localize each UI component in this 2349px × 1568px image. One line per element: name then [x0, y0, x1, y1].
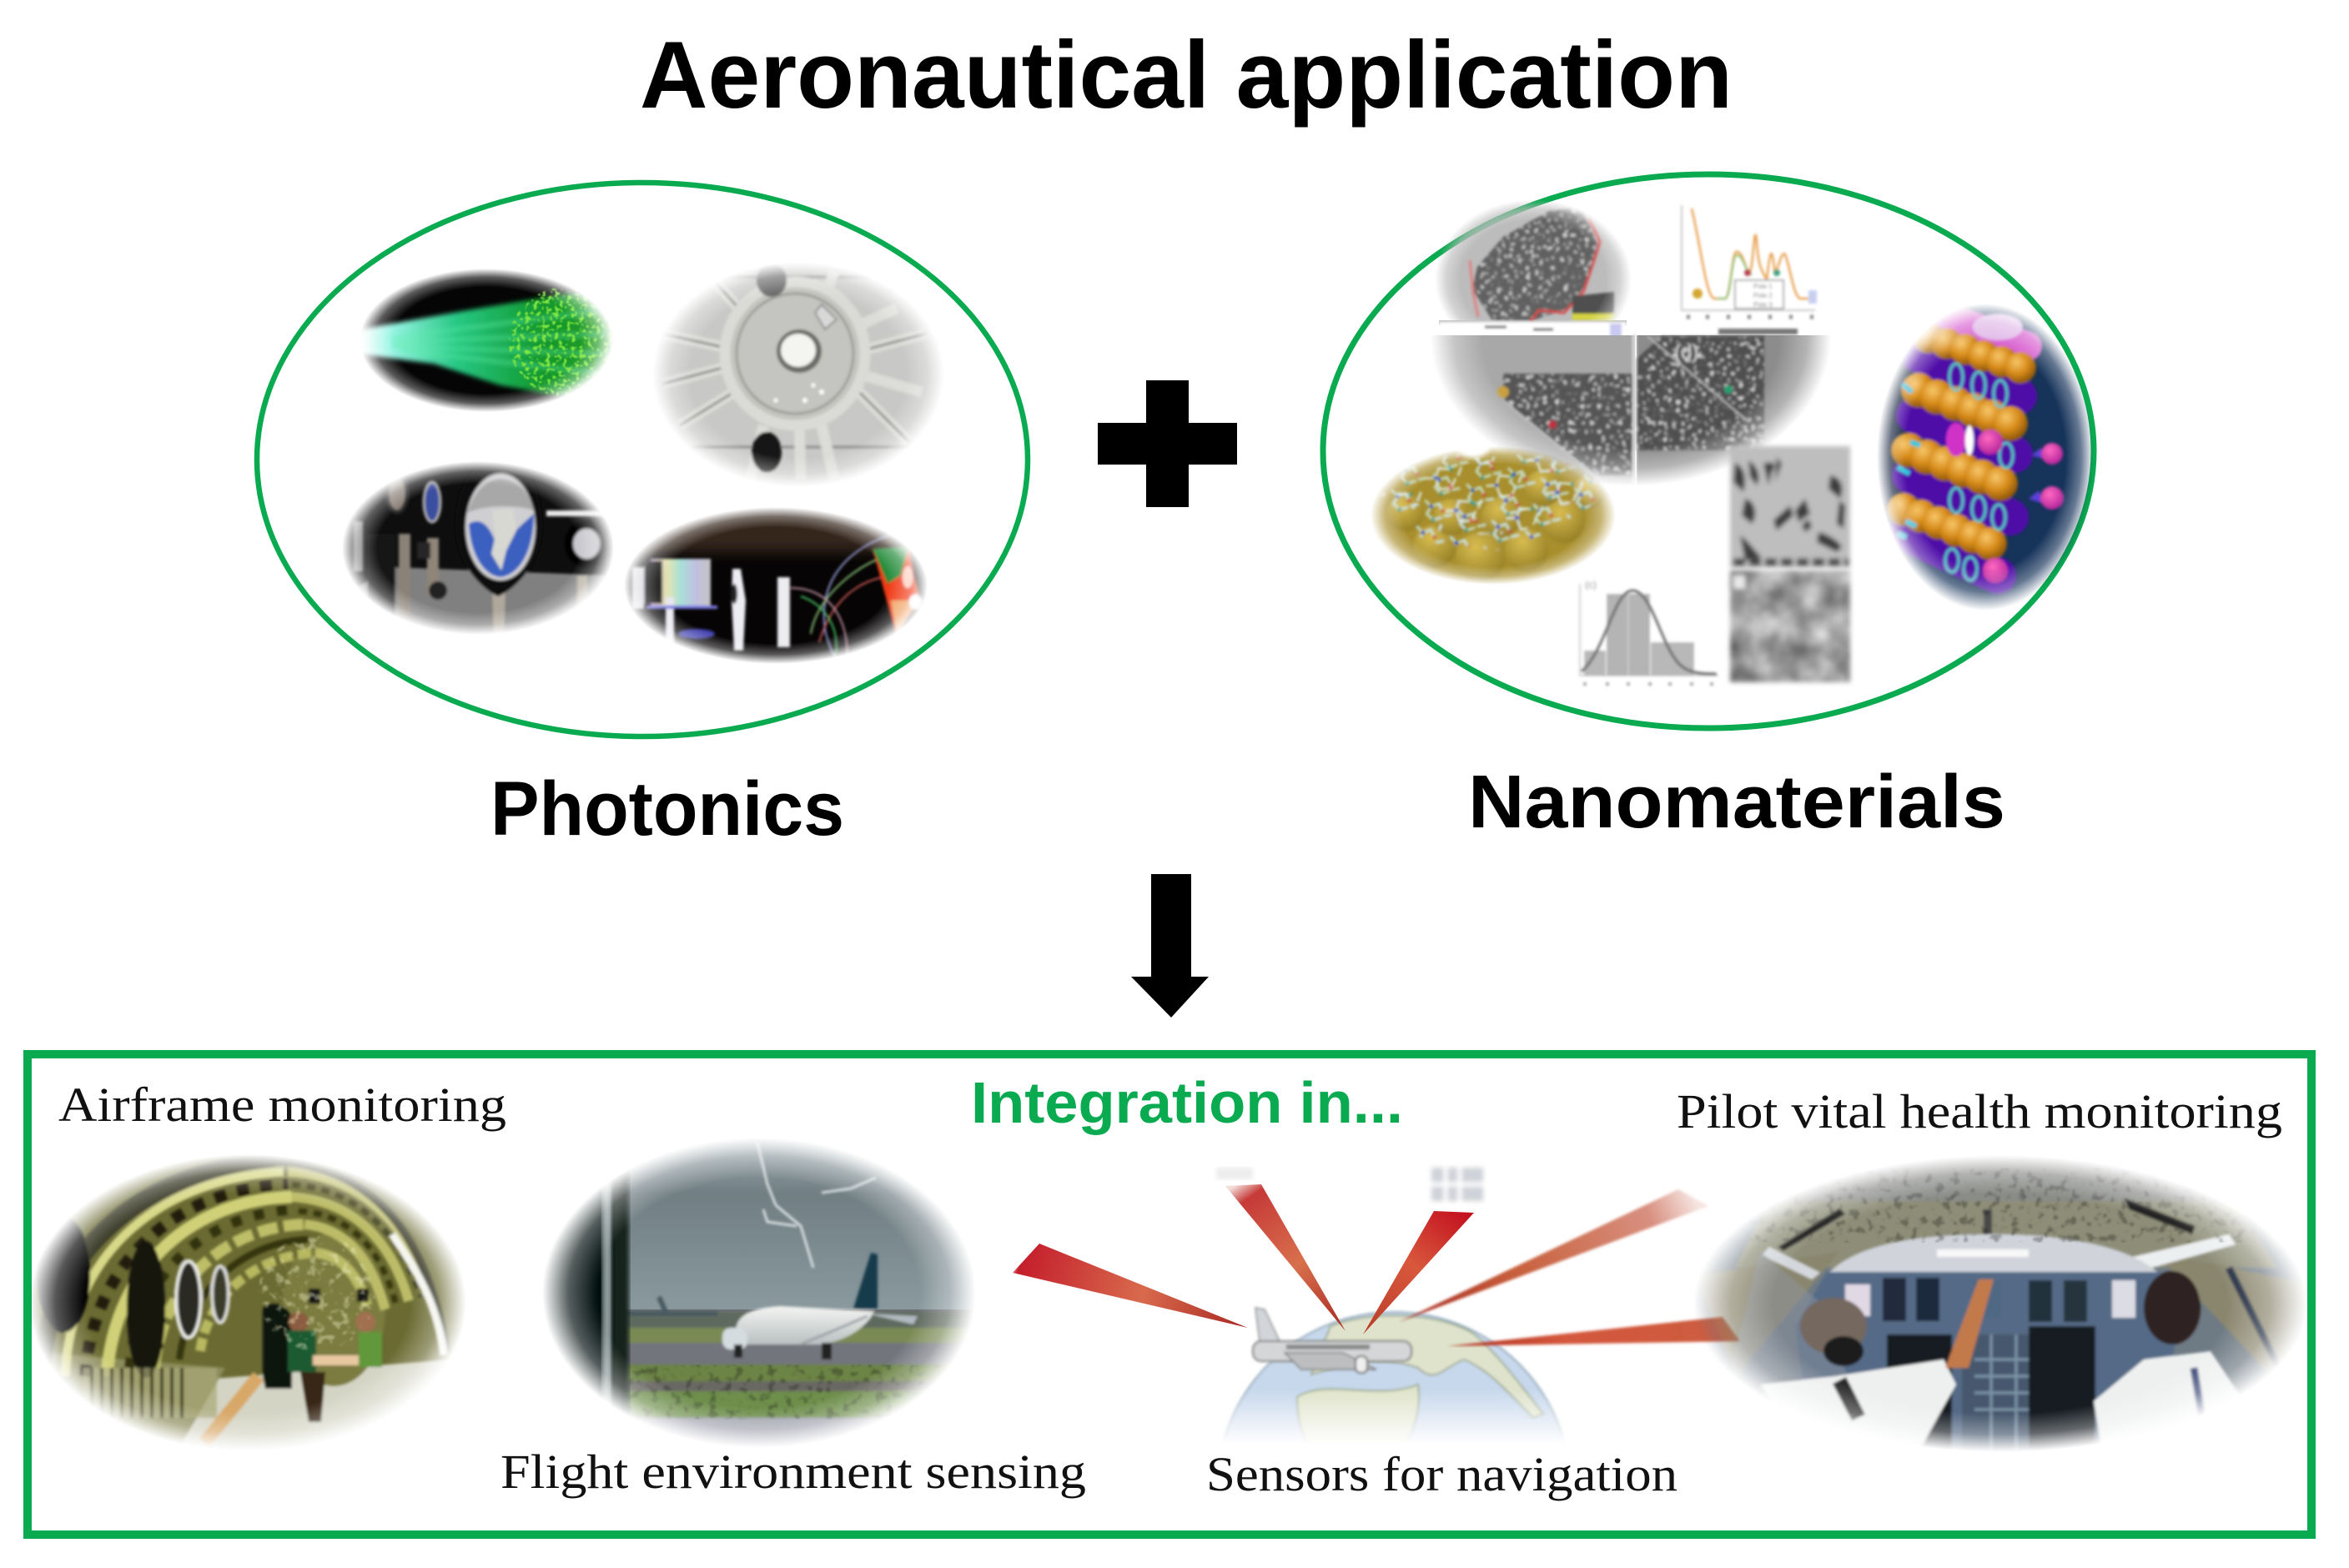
- micrograph: TEM dark blobs: [1730, 446, 1850, 568]
- chart: spectrum line plot: Pole 3: [1753, 301, 1773, 309]
- icon: airplane: [1253, 1308, 1411, 1373]
- chart: spectrum line plot: Pole 2: [1753, 292, 1773, 299]
- photo: airframe fuselage interior: [25, 1151, 471, 1455]
- label: Flight environment sensing: Flight environment sensing: [500, 1445, 1086, 1499]
- photo: cockpit with pilots: [1685, 1151, 2319, 1458]
- photo: plane on runway in lightning storm: [544, 1140, 973, 1445]
- chart: spectrum line plot: Pole 1: [1753, 283, 1773, 290]
- panel: nanomaterials: [1323, 174, 2110, 728]
- icon: satellite left: [1216, 1168, 1253, 1179]
- micrograph: grey texture panel: [1730, 570, 1850, 682]
- chart: histogram with curve: [1572, 574, 1718, 686]
- heading: Nanomaterials: Nanomaterials: [1468, 761, 2005, 844]
- label: Sensors for navigation: Sensors for navigation: [1206, 1447, 1677, 1501]
- micrograph: dark diagonal cross-sections: (d): [1674, 341, 1698, 364]
- photonics ellipse outline: [257, 183, 1028, 736]
- nanomaterials ellipse outline: [1323, 174, 2094, 728]
- photo: green optical fibres: [362, 269, 612, 412]
- beam 4: [1399, 1189, 1708, 1322]
- beam 3: [1363, 1211, 1474, 1334]
- panel: integration box: [25, 1054, 2319, 1535]
- micrograph: SEM particle with red outline: [1436, 200, 1630, 335]
- illustration: satellite beams and globe: [1013, 1166, 1740, 1447]
- heading: Integration in...: Integration in...: [971, 1070, 1403, 1135]
- globe: [1222, 1312, 1566, 1447]
- beam 2: [1225, 1184, 1346, 1331]
- icon: satellite right: [1431, 1166, 1483, 1203]
- micrograph: dark diagonal cross-sections: [1431, 334, 1832, 485]
- plus sign: [1098, 380, 1237, 507]
- photo: optical bench with spectrum: [625, 507, 927, 664]
- chart: histogram with curve: (c): [1585, 579, 1597, 591]
- illustration: DNA helix with gold beads: [1878, 304, 2092, 610]
- integration frame: [28, 1054, 2311, 1535]
- photo: optical lens on posts: [343, 462, 613, 634]
- beam 1: [1013, 1244, 1248, 1328]
- beam 5: [1447, 1317, 1740, 1346]
- photo: grey disk component: [651, 260, 946, 489]
- label: Pilot vital health monitoring: Pilot vital health monitoring: [1677, 1084, 2282, 1138]
- arrow down: [1131, 874, 1209, 1018]
- chart: spectrum line plot: [1682, 205, 1817, 334]
- panel: photonics: [257, 183, 1028, 736]
- photo: gold nanoparticles with molecules: [1371, 447, 1615, 584]
- label: Airframe monitoring: Airframe monitoring: [58, 1078, 506, 1132]
- heading: Photonics: Photonics: [490, 766, 844, 852]
- title: Aeronautical application: [640, 23, 1733, 128]
